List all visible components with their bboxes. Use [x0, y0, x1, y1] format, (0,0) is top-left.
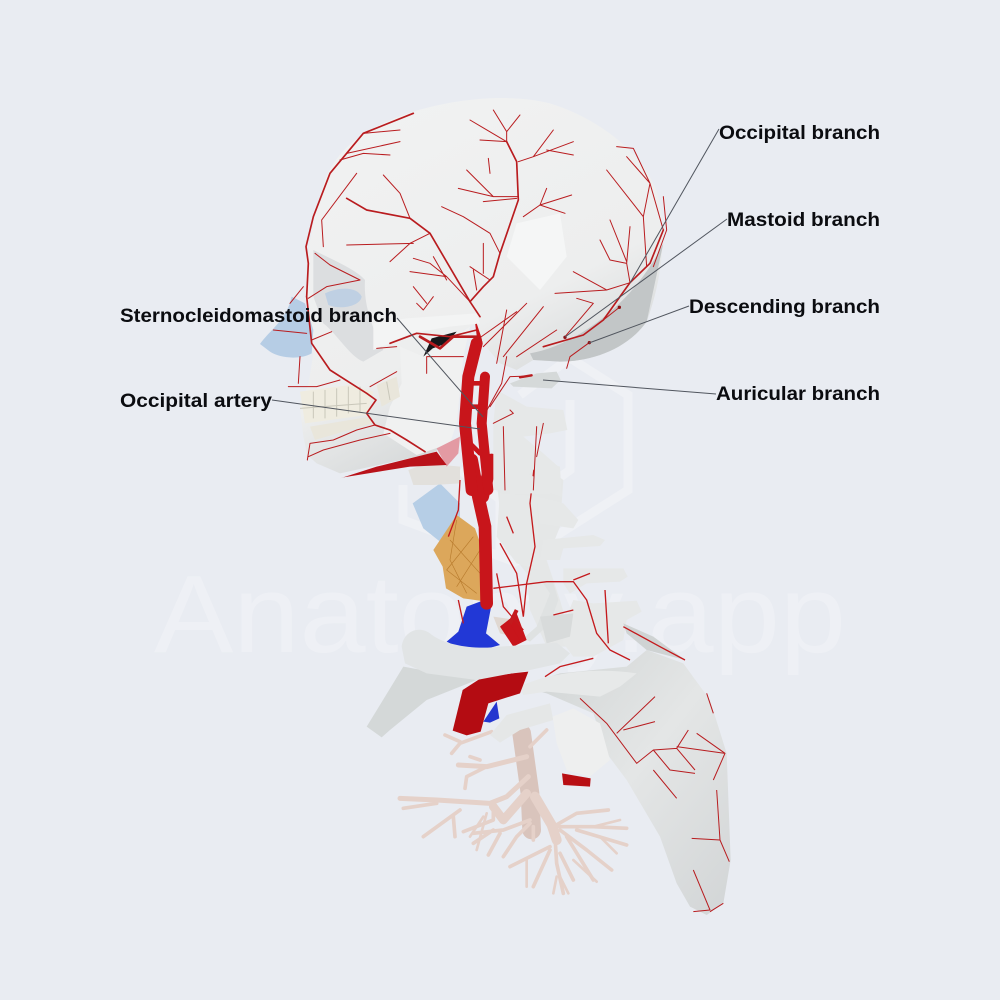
label: Sternocleidomastoid branch: Sternocleidomastoid branch: [120, 305, 397, 327]
facial muscle vessel: [340, 452, 447, 478]
skull sheen: [507, 213, 567, 290]
submandibular gland: [437, 437, 460, 467]
label: Occipital artery: Occipital artery: [120, 390, 272, 412]
left scapula: [367, 667, 477, 737]
zygomatic arch: [373, 313, 480, 350]
common carotid: [472, 460, 492, 603]
vertebral column: [497, 460, 573, 647]
label: Occipital branch: Occipital branch: [719, 122, 880, 144]
socket blue membrane: [325, 289, 362, 307]
right scapula: [520, 650, 731, 915]
scapula arteries: [580, 693, 729, 912]
skull and head group: [260, 98, 667, 493]
glenoid: [553, 708, 610, 777]
neck arteries: [448, 460, 685, 677]
lower anatomy group: [367, 460, 731, 915]
spine upper vertebrae: [493, 390, 567, 493]
watermark: [154, 358, 846, 676]
mandible ramus: [383, 327, 470, 455]
spine lower vertebrae: [497, 460, 685, 660]
dark sinus: [423, 332, 457, 357]
subclavian stub: [562, 773, 591, 787]
atlas transverse process: [510, 372, 561, 388]
leader lines: [272, 129, 727, 429]
eye socket: [313, 250, 383, 362]
subclavian and lower carotid: [500, 613, 527, 647]
label: Descending branch: Descending branch: [689, 296, 880, 318]
upper and lower teeth: [300, 377, 400, 440]
left clavicle: [402, 630, 570, 680]
coracoid process: [490, 703, 553, 743]
nasal cartilage: [260, 297, 313, 358]
cranium: [299, 98, 663, 473]
aortic arch blue lower: [483, 702, 499, 723]
carotid and branches: [465, 317, 488, 490]
aorta: [453, 672, 528, 735]
thyroid gland: [433, 515, 487, 602]
watermark: Anatomy.app: [154, 553, 846, 676]
head arteries: [273, 110, 667, 490]
acromion and distal clavicle: [519, 671, 637, 697]
label: Mastoid branch: Mastoid branch: [727, 209, 880, 231]
cricoid: [408, 463, 460, 485]
bronchial tree: [400, 730, 627, 893]
back of skull shadow: [530, 243, 663, 362]
blue vein: [447, 602, 500, 652]
label: Auricular branch: Auricular branch: [716, 383, 880, 405]
first ribs shadow: [493, 617, 527, 640]
larynx cartilage: [413, 483, 460, 542]
